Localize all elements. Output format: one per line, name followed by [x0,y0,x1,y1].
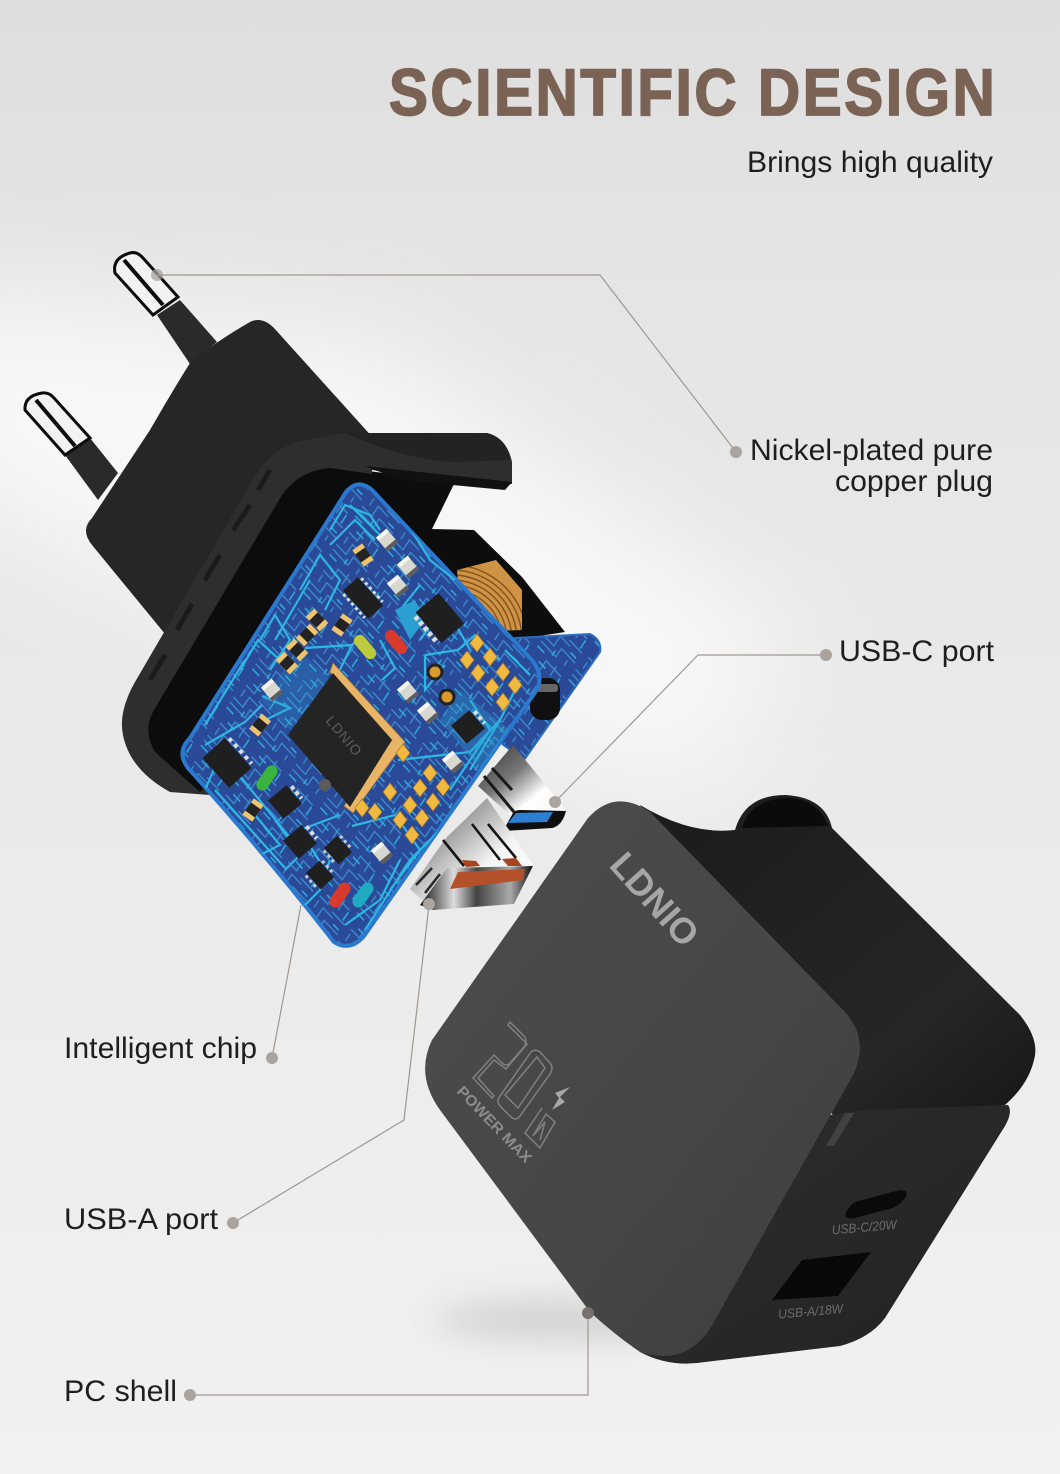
callout: PC shell: PC shell [64,1375,177,1408]
front port panel [640,1105,1010,1364]
charger: internal parts behind board [360,470,600,760]
callout: intelligent chip: Intelligent chip [64,1032,257,1065]
plug back body [86,320,375,640]
icon: gold solder pads [355,634,522,844]
rear black housing [360,470,565,650]
callout: nickel-plated plug: Nickel-plated pure [750,434,993,467]
title: SCIENTIFIC DESIGN [389,57,997,130]
callout: PC shell [64,1307,594,1408]
panel: circuit board [182,484,540,946]
icon: white ceramic capacitors [261,529,464,864]
USB-A connector [410,798,534,910]
callout: nickel-plated plug [151,269,993,498]
circuit traces [205,505,530,930]
USB-C label: USB-C/20W [831,1217,899,1237]
USB-C connector [478,745,566,831]
copper coil [457,560,522,630]
subtitle: Brings high quality [747,146,993,179]
icon: lower prong [25,393,118,500]
icon: main chip with LDNIO mark: LDNIO [323,713,366,760]
icon: coloured capacitors [254,627,454,910]
USB-A label: USB-A/18W [778,1301,845,1322]
rear circuit board [490,634,600,760]
side of body [640,795,1035,1125]
callout: USB-A port [64,898,435,1236]
callout: USB-A port: USB-A port [64,1203,219,1236]
callout: nickel-plated plug: copper plug [835,465,993,498]
callout: USB-C port [549,635,995,808]
rear notch [742,798,828,828]
icon: USB-A port opening [772,1252,871,1300]
panel highlight [826,1113,854,1146]
charger: open shell frame [122,433,512,795]
icon: black IC packages [202,576,487,891]
wattage mark [473,1022,555,1148]
icon: main chip with LDNIO mark [288,663,405,813]
black capacitor [530,678,560,720]
callout: intelligent chip [64,779,331,1065]
charger: main closed body [425,795,1035,1364]
icon: upper prong [115,253,217,364]
callout: USB-C port: USB-C port [839,635,995,668]
icon: small gold-capped resistors [242,543,374,822]
logo text: LDNIO [602,844,707,955]
charger: plug base with prongs [25,253,375,640]
power max label: POWER MAX [453,1083,535,1167]
icon: lightning bolt [552,1087,570,1110]
front face [425,801,860,1356]
icon: USB-C port opening [846,1190,907,1218]
floor shadow [435,1300,685,1340]
